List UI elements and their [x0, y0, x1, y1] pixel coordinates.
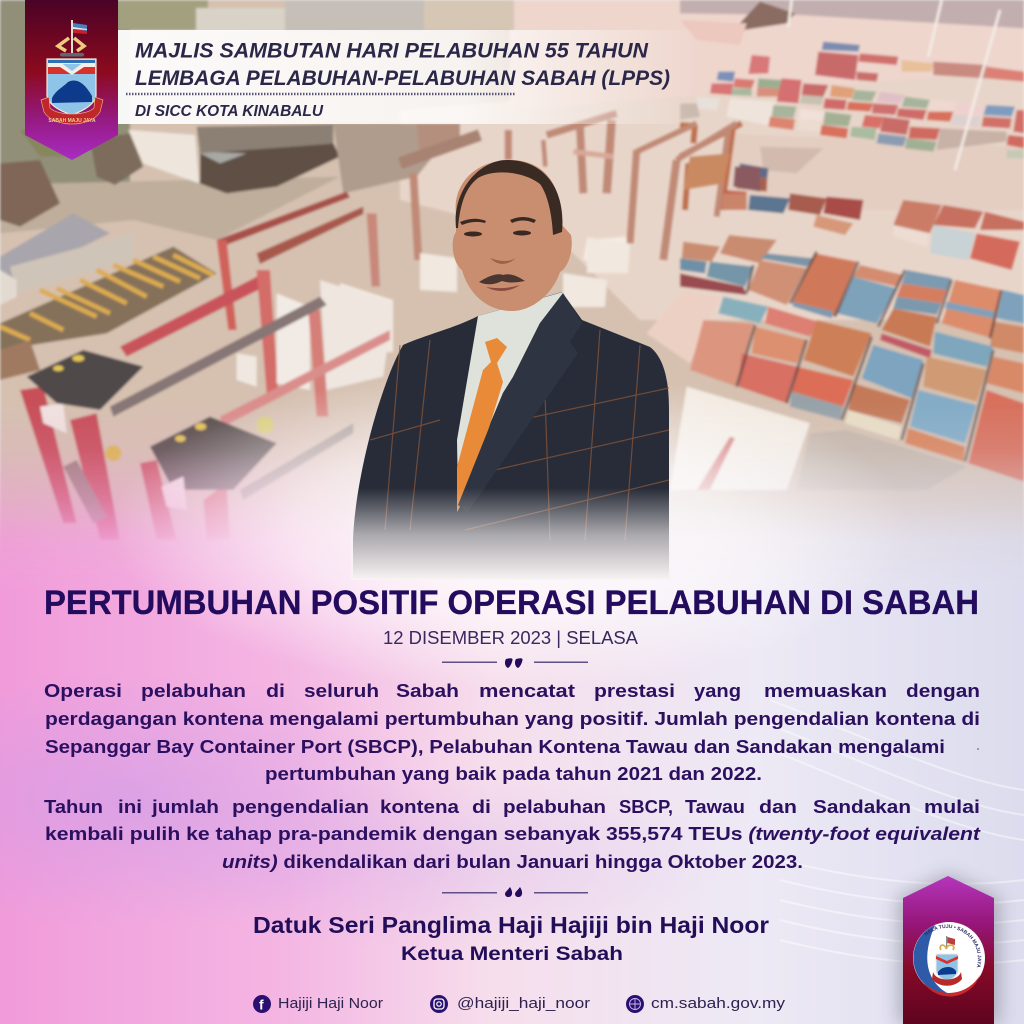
jacket lapel: [458, 293, 582, 513]
small stray dot: [977, 748, 979, 750]
top-left ribbon with Sabah coat of arms: [25, 0, 118, 160]
gantry cranes, top centre: [400, 113, 760, 260]
shirt: [457, 292, 567, 500]
large container stacks, right: [647, 190, 1024, 490]
portrait of Datuk Seri Panglima Haji Hajiji: [351, 160, 671, 580]
body paragraph two: SBCP,: [619, 797, 673, 817]
emblem motto ribbon: [41, 97, 103, 124]
body paragraph one: [44, 681, 980, 784]
town area, upper left: [0, 123, 460, 240]
dotted divider: [126, 93, 515, 95]
body paragraph two: ini: [118, 797, 142, 817]
ribbon shadow: [898, 874, 1000, 1024]
emblem flag: [71, 20, 87, 54]
body paragraph two: [44, 797, 981, 872]
header band: [118, 30, 698, 124]
opening quote divider: [442, 658, 588, 668]
body paragraph one: Operasi: [44, 681, 122, 701]
eyes and brows: [460, 217, 536, 236]
social: website: [626, 995, 786, 1013]
event organiser: LEMBAGA PELABUHAN-PELABUHAN SABAH (LPPS): [135, 67, 670, 90]
body paragraph one: Sepanggar Bay Container Port (SBCP), Pelabuhan Kontena Tawau dan Sandakan mengalami: [45, 737, 945, 757]
white glow behind portrait: [110, 370, 910, 690]
body paragraph one: seluruh: [304, 681, 379, 701]
emblem motto ribbon: SABAH MAJU JAYA: [48, 118, 96, 124]
social: website: cm.sabah.gov.my: [651, 995, 786, 1012]
date: 12 DISEMBER 2023 | SELASA: [383, 628, 638, 648]
body paragraph two: Sandakan: [813, 797, 911, 817]
body paragraph two: kontena: [380, 797, 460, 817]
body paragraph one: pertumbuhan yang baik pada tahun 2021 dan 2022.: [265, 764, 762, 784]
hair: [456, 160, 562, 235]
orange tie: [457, 338, 507, 512]
body paragraph one: di: [266, 681, 285, 701]
body paragraph one: Sabah: [396, 681, 459, 701]
body paragraph two: mulai: [924, 797, 980, 817]
speaker role: Ketua Menteri Sabah: [401, 943, 623, 965]
body paragraph two: jumlah: [151, 797, 219, 817]
body paragraph one: perdagangan kontena mengalami pertumbuhan yang positif. Jumlah pengendalian kontena di: [45, 709, 980, 729]
pale containers behind portrait: [340, 237, 630, 352]
emblem shield: [47, 59, 96, 115]
round badge: HALA TUJU • SABAH MAJU JAYA: [924, 924, 982, 968]
body paragraph two: Tawau: [685, 797, 745, 817]
headline: PERTUMBUHAN POSITIF OPERASI PELABUHAN DI SABAH: [44, 584, 979, 622]
body paragraph two: units) dikendalikan dari bulan Januari hingga Oktober 2023.: [222, 852, 803, 872]
suit jacket: [353, 292, 669, 578]
body paragraph two: dan: [759, 797, 797, 817]
portrait bottom fade: [351, 488, 671, 580]
round badge: [913, 922, 985, 996]
body paragraph one: pelabuhan: [141, 681, 246, 701]
body paragraph one: dengan: [906, 681, 980, 701]
bottom panel gradient: [0, 400, 1024, 1024]
venue: DI SICC KOTA KINABALU: [135, 103, 323, 120]
emblem crest arms: [58, 38, 84, 51]
body paragraph one: yang: [694, 681, 741, 701]
head: [453, 160, 572, 311]
body paragraph one: memuaskan: [764, 681, 887, 701]
body paragraph two: kembali pulih ke tahap pra-pandemik dengan sebanyak 355,574 TEUs (twenty-foot equivalent: [45, 824, 981, 844]
emblem crest base: [60, 53, 84, 56]
suit check pattern: [370, 330, 669, 540]
speaker name: Datuk Seri Panglima Haji Hajiji bin Haji Noor: [253, 912, 769, 938]
closing quote divider: [442, 887, 588, 897]
body paragraph two: di: [472, 797, 491, 817]
ribbon: [903, 876, 994, 1024]
bottom-right ribbon with round badge: [888, 868, 1010, 1024]
social: Instagram: [430, 995, 590, 1013]
moustache: [479, 274, 525, 284]
social: Facebook: f: [259, 996, 264, 1012]
body paragraph one: mencatat: [479, 681, 575, 701]
social: Facebook: Hajiji Haji Noor: [278, 995, 383, 1012]
event title: MAJLIS SAMBUTAN HARI PELABUHAN 55 TAHUN: [135, 40, 649, 62]
social: Instagram: @hajiji_haji_noor: [457, 995, 590, 1012]
mouth: [486, 285, 520, 291]
body paragraph two: pengendalian: [232, 797, 369, 817]
cranes, warehouse and stacks, left: [0, 192, 393, 540]
nose shadow: [490, 258, 516, 264]
body paragraph one: prestasi: [594, 681, 675, 701]
top container yard and sea: [680, 0, 1024, 210]
body paragraph two: Tahun: [44, 797, 103, 817]
body paragraph two: pelabuhan: [503, 797, 606, 817]
